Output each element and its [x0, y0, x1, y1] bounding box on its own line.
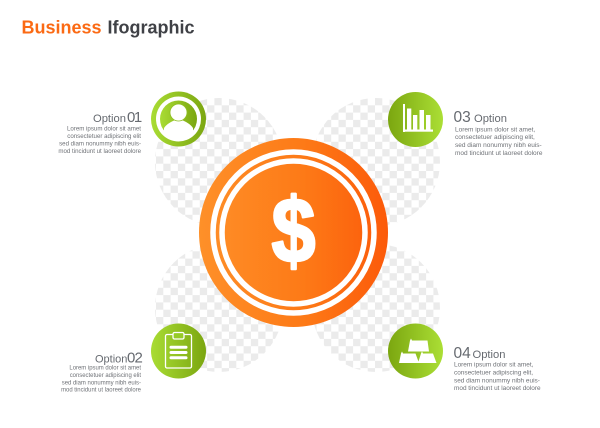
- option 01 text: 01: [127, 109, 142, 126]
- option 04 text: [454, 345, 541, 392]
- option 03 text: consectetuer adipiscing elit,: [455, 134, 535, 141]
- option 02 text: consectetuer adipiscing elit: [70, 373, 141, 379]
- icon: gold bars badge: [388, 324, 443, 378]
- title: Business: [22, 18, 102, 38]
- icon: bar chart badge: [388, 92, 443, 147]
- option 03 text: [454, 109, 543, 157]
- option 04 text: mod tincidunt ut laoreet dolore: [454, 385, 541, 392]
- option 01 text: Lorem ipsum dolor sit amet: [67, 126, 141, 132]
- option 01 text: consectetuer adipiscing elit: [67, 133, 141, 140]
- background checker circles: [155, 98, 440, 372]
- option 02 text: Option: [95, 354, 127, 366]
- option 02 text: 02: [127, 350, 143, 366]
- option 01 text: Option: [93, 113, 126, 125]
- option 02 text: sed diam nonummy nibh euis-: [62, 380, 141, 386]
- option 04 text: consectetuer adipiscing elit,: [454, 369, 533, 376]
- option 01 text: [58, 109, 142, 155]
- option 04 text: 04: [454, 345, 471, 362]
- option 01 text: mod tincidunt ut laoreet dolore: [58, 148, 142, 155]
- option 02 text: Lorem ipsum dolor sit amet: [69, 366, 141, 372]
- title: [22, 18, 195, 38]
- option 04 text: Lorem ipsum dolor sit amet,: [454, 362, 534, 369]
- option 03 text: Option: [474, 113, 507, 125]
- option 03 text: sed diam nonummy nibh euis-: [455, 142, 542, 149]
- title: Ifographic: [108, 18, 195, 38]
- option 02 text: mod tincidunt ut laoreet dolore: [61, 388, 142, 394]
- option 03 text: 03: [454, 109, 471, 126]
- option 02 text: [61, 350, 143, 394]
- central coin: [199, 138, 388, 327]
- option 04 text: Option: [472, 349, 505, 361]
- icon: person badge: [151, 92, 206, 146]
- icon: clipboard badge: [151, 324, 206, 378]
- option 01 text: sed diam nonummy nibh euis-: [59, 140, 141, 148]
- option 04 text: sed diam nonummy nibh euis-: [454, 377, 540, 384]
- icon: dollar sign: $: [271, 179, 316, 282]
- option 03 text: Lorem ipsum dolor sit amet,: [455, 126, 535, 134]
- option 03 text: mod tincidunt ut laoreet dolore: [455, 150, 543, 157]
